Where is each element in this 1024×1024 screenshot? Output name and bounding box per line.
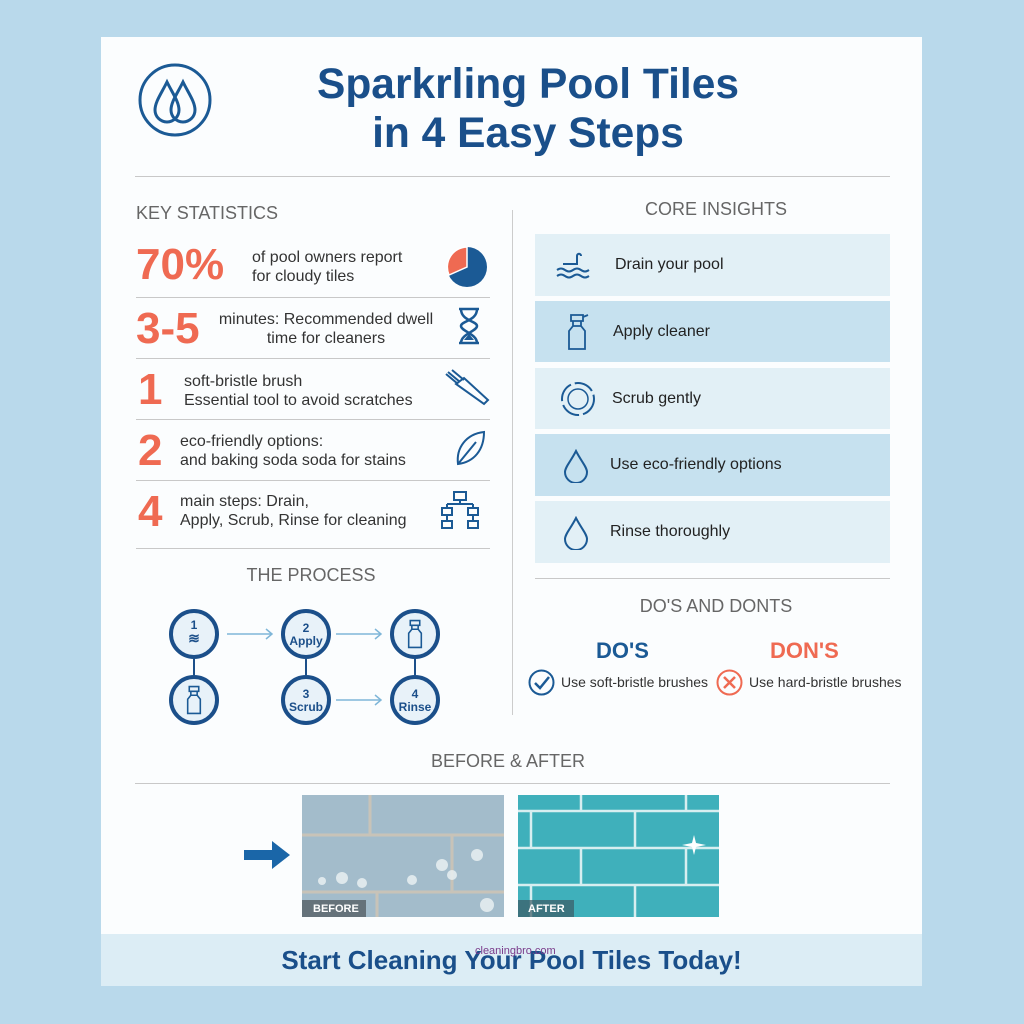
- panel: key statistics: and baking soda soda for stains: [180, 452, 406, 469]
- insight: drain: [535, 234, 890, 296]
- insight: eco: Use eco-friendly options: [610, 456, 782, 473]
- panel: dos and donts: DON'S: [770, 638, 839, 663]
- title: Sparkrling Pool Tiles: [317, 61, 739, 108]
- panel: dos and donts: [528, 638, 902, 696]
- heading: dos and donts: DO'S AND DONTS: [640, 596, 792, 616]
- stat 70%: 70%: [136, 240, 224, 289]
- image: after: [518, 795, 719, 917]
- insight: rinse: [535, 501, 890, 563]
- image: after: AFTER: [528, 903, 565, 915]
- panel: dos and donts: Use soft-bristle brushes: [561, 674, 708, 690]
- panel: key statistics: Essential tool to avoid scratches: [184, 392, 413, 409]
- panel: key statistics: main steps: Drain,: [180, 493, 309, 510]
- footer banner: [101, 934, 922, 986]
- icon: leaf: [456, 430, 485, 466]
- insight: drain: Drain your pool: [615, 256, 724, 273]
- insight: apply cleaner: Apply cleaner: [613, 323, 710, 340]
- watermark: cleaningbro.com: [475, 945, 556, 957]
- process diagram: 1: [191, 618, 197, 632]
- panel: key statistics: for cloudy tiles: [252, 268, 354, 285]
- icon: check: [528, 670, 554, 696]
- insight: apply cleaner: [535, 301, 890, 362]
- icon: hourglass: [459, 308, 479, 344]
- title: [317, 61, 739, 157]
- process diagram: Apply: [289, 634, 323, 648]
- divider vertical: [512, 210, 513, 715]
- process diagram: Rinse: [399, 700, 431, 714]
- insight: rinse: Rinse thoroughly: [610, 523, 730, 540]
- panel: key statistics: soft-bristle brush: [184, 373, 302, 390]
- panel: dos and donts: DO'S: [596, 638, 649, 663]
- panel: dos and donts: Use hard-bristle brushes: [749, 674, 902, 690]
- heading: core insights: CORE INSIGHTS: [645, 199, 787, 219]
- process diagram: [169, 609, 440, 725]
- panel: key statistics: of pool owners report: [252, 249, 402, 266]
- process diagram: Scrub: [289, 700, 323, 714]
- title: in 4 Easy Steps: [372, 110, 684, 157]
- process diagram: 3: [303, 687, 309, 701]
- arrow: [244, 841, 290, 869]
- panel: key statistics: time for cleaners: [267, 330, 385, 347]
- image: before: BEFORE: [313, 903, 359, 915]
- heading: before & after: BEFORE & AFTER: [431, 751, 585, 771]
- stat 1: 1: [138, 365, 162, 414]
- icon: cross: [716, 670, 742, 696]
- insight: eco: [535, 434, 890, 496]
- panel: key statistics: [136, 240, 490, 549]
- insight: scrub: [535, 368, 890, 429]
- panel: key statistics: minutes: Recommended dwell: [219, 311, 433, 328]
- panel: key statistics: eco-friendly options:: [180, 433, 323, 450]
- icon: pie chart: [448, 247, 487, 287]
- process diagram: ≋: [188, 630, 200, 646]
- icon: flowchart: [441, 491, 479, 529]
- heading: the process: THE PROCESS: [246, 565, 376, 585]
- process diagram: 4: [412, 687, 418, 701]
- stat 2: 2: [138, 426, 162, 475]
- image: before: [302, 795, 504, 917]
- panel: core insights: [535, 234, 890, 563]
- heading: key statistics: KEY STATISTICS: [136, 203, 278, 223]
- footer banner: Start Cleaning Your Pool Tiles Today!: [281, 945, 742, 975]
- process diagram: 2: [303, 621, 309, 635]
- stat 3-5: 3-5: [136, 304, 200, 353]
- panel: key statistics: Apply, Scrub, Rinse for cleaning: [180, 512, 406, 529]
- card: [101, 37, 922, 986]
- insight: scrub: Scrub gently: [612, 390, 701, 407]
- icon: logo water drops: [138, 64, 212, 136]
- stat 4: 4: [138, 487, 162, 536]
- icon: brush: [445, 369, 490, 406]
